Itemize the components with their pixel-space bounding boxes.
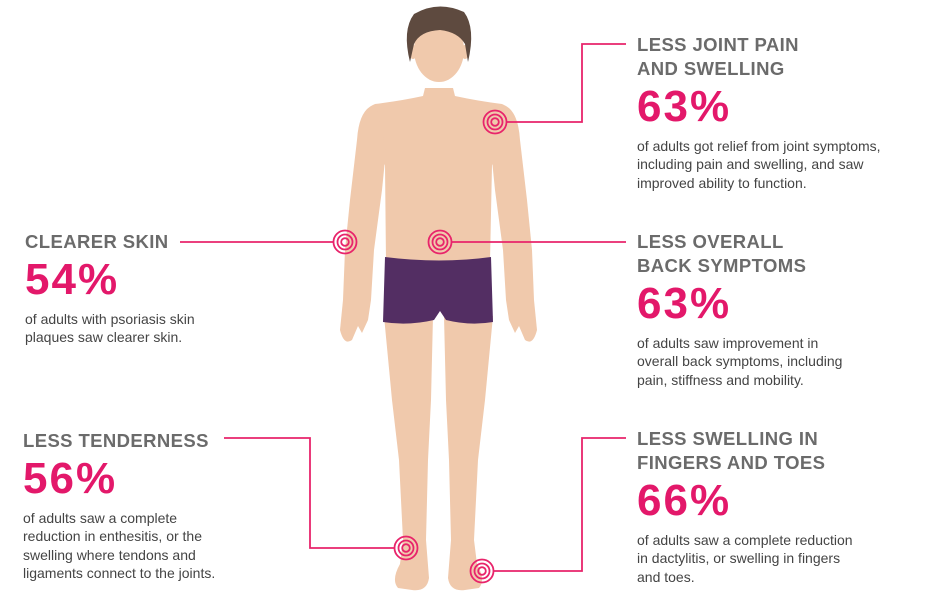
panel: joint pain: improved ability to function. <box>637 175 807 191</box>
panel: clearer skin <box>25 231 195 345</box>
shorts <box>383 257 493 324</box>
panel: tenderness: reduction in enthesitis, or the <box>23 528 202 544</box>
panel: fingers and toes: LESS SWELLING IN <box>637 428 818 449</box>
legs <box>384 316 433 590</box>
panel: tenderness: LESS TENDERNESS <box>23 430 209 451</box>
panel: fingers and toes: FINGERS AND TOES <box>637 452 825 473</box>
panel: tenderness: ligaments connect to the joints. <box>23 565 215 581</box>
panel: tenderness <box>23 430 215 581</box>
panel: joint pain: AND SWELLING <box>637 58 785 79</box>
panel: back symptoms: 63% <box>637 279 731 328</box>
panel: fingers and toes: 66% <box>637 476 731 525</box>
panel: joint pain <box>637 34 881 191</box>
head <box>414 18 464 82</box>
panel: joint pain: 63% <box>637 82 731 131</box>
panel: tenderness: swelling where tendons and <box>23 547 196 563</box>
figure <box>340 18 537 590</box>
hair <box>407 6 471 62</box>
panel: clearer skin: of adults with psoriasis skin <box>25 311 195 327</box>
panel: tenderness: 56% <box>23 454 117 503</box>
panel: clearer skin: CLEARER SKIN <box>25 231 169 252</box>
panel: joint pain: including pain and swelling, and saw <box>637 156 863 172</box>
target icons <box>334 110 506 582</box>
panel: back symptoms: BACK SYMPTOMS <box>637 255 806 276</box>
panel: fingers and toes: and toes. <box>637 569 695 585</box>
panel: back symptoms <box>637 231 842 388</box>
panel: fingers and toes: of adults saw a complete reduction <box>637 532 853 548</box>
panel: tenderness: of adults saw a complete <box>23 510 177 526</box>
panel: back symptoms: LESS OVERALL <box>637 231 784 252</box>
panel: joint pain: LESS JOINT PAIN <box>637 34 799 55</box>
panel: joint pain: of adults got relief from joint symptoms, <box>637 138 881 154</box>
panel: back symptoms: of adults saw improvement in <box>637 335 818 351</box>
connector lines <box>507 44 626 122</box>
torso <box>362 88 514 262</box>
panel: clearer skin: plaques saw clearer skin. <box>25 329 182 345</box>
panel: back symptoms: pain, stiffness and mobility. <box>637 372 804 388</box>
arms <box>340 104 386 342</box>
panel: clearer skin: 54% <box>25 255 119 304</box>
panel: fingers and toes: in dactylitis, or swelling in fingers <box>637 550 840 566</box>
panel: fingers and toes <box>637 428 853 585</box>
panel: back symptoms: overall back symptoms, including <box>637 353 842 369</box>
